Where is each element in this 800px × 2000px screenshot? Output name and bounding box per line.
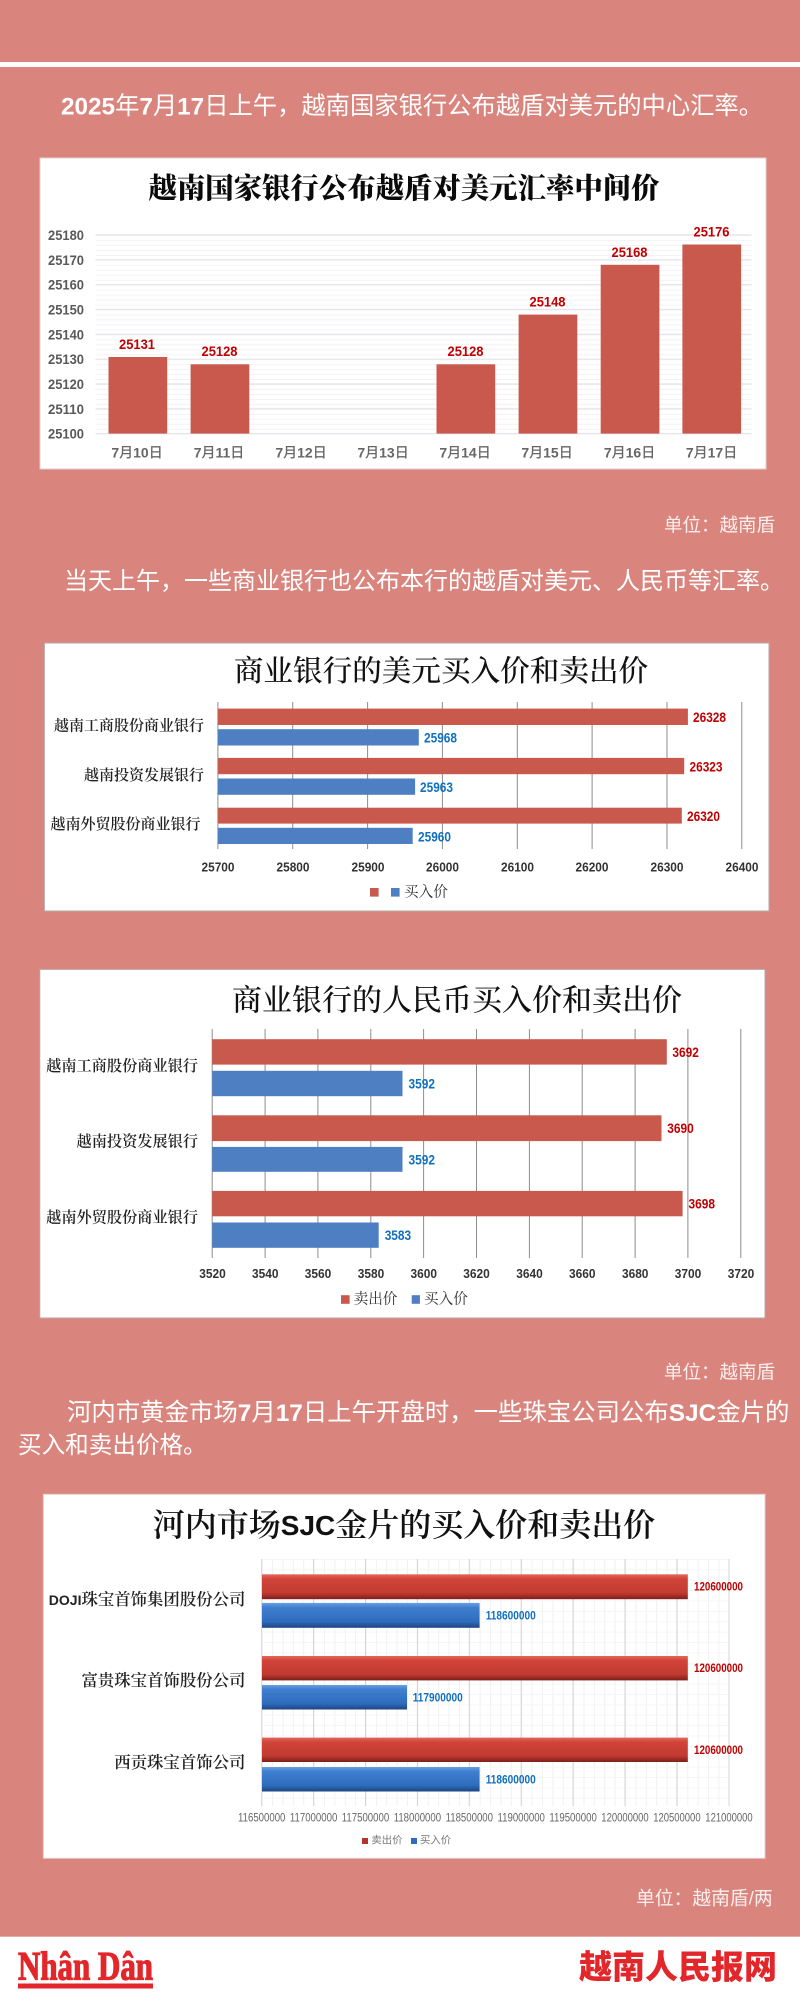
- x axis date labels: 7月10日: [111, 445, 163, 461]
- x axis date labels: 7月17日: [686, 445, 737, 461]
- sell price bars: [212, 1039, 683, 1216]
- bank labels: 越南外贸股份商业银行: [46, 1208, 198, 1226]
- bar value labels: 25128: [202, 343, 238, 359]
- y axis labels: 25110: [48, 401, 84, 417]
- legend: 卖出价: [371, 1834, 403, 1846]
- x axis labels: 3520: [199, 1266, 226, 1281]
- intro text: gold market: 买入和卖出价格。: [18, 1432, 207, 1459]
- bars: [108, 244, 741, 434]
- y axis labels: 25160: [48, 277, 84, 293]
- value labels: 117900000: [413, 1690, 463, 1704]
- panel: USD buy and sell bar chart: [44, 643, 769, 911]
- bar value labels: 25176: [694, 224, 730, 240]
- value labels: 25968: [424, 730, 457, 746]
- x axis labels: 3560: [305, 1266, 331, 1281]
- bank labels: [50, 716, 204, 833]
- x axis labels: 26200: [576, 860, 608, 874]
- bank labels: 越南投资发展银行: [76, 1132, 198, 1150]
- company labels: 富贵珠宝首饰股份公司: [81, 1671, 245, 1690]
- bar value labels: 25148: [530, 294, 566, 310]
- value labels: 118600000: [486, 1772, 536, 1786]
- x axis labels: [199, 1266, 754, 1281]
- x axis labels: 3720: [728, 1266, 754, 1281]
- y axis labels: 25140: [48, 326, 84, 342]
- legend: 买入价: [420, 1834, 452, 1846]
- legend: 买入价: [404, 883, 448, 900]
- y axis labels: [48, 227, 84, 442]
- x axis labels: 116500000: [238, 1812, 285, 1824]
- x axis labels: 3620: [463, 1266, 490, 1281]
- x axis labels: 120000000: [601, 1812, 649, 1824]
- footer band: [0, 1937, 800, 2000]
- x axis labels: 26100: [501, 860, 534, 874]
- value labels: 3690: [667, 1120, 694, 1136]
- value labels: 120600000: [694, 1743, 743, 1757]
- x axis labels: [202, 860, 758, 874]
- company labels: 西贡珠宝首饰公司: [114, 1753, 245, 1772]
- value labels: [418, 709, 726, 844]
- legend: [362, 1834, 452, 1846]
- intro text: gold market: [18, 1400, 789, 1459]
- chart title: 越南国家银行公布越盾对美元汇率中间价: [148, 172, 660, 205]
- unit note 2: 单位：越南盾: [664, 1362, 775, 1382]
- value labels: 3583: [385, 1227, 411, 1243]
- x axis labels: 3660: [569, 1266, 596, 1281]
- legend: 买入价: [424, 1290, 468, 1308]
- panel: RMB buy and sell bar chart: [40, 969, 765, 1318]
- legend: 卖出价: [354, 1290, 398, 1308]
- x axis date labels: 7月12日: [275, 445, 327, 461]
- bank labels: [46, 1057, 198, 1226]
- x axis labels: 117500000: [342, 1812, 389, 1824]
- x axis labels: 3700: [675, 1266, 701, 1281]
- x axis labels: [238, 1812, 753, 1824]
- value labels: 26328: [693, 709, 726, 725]
- x axis labels: 3580: [358, 1266, 384, 1281]
- chart title: 河内市场SJC金片的买入价和卖出价: [153, 1507, 655, 1543]
- x axis date labels: 7月11日: [194, 445, 244, 461]
- sell price bars: [218, 709, 688, 824]
- y axis labels: 25130: [48, 351, 84, 367]
- x axis labels: 25800: [276, 860, 310, 874]
- company labels: [49, 1590, 245, 1772]
- bank labels: 越南投资发展银行: [84, 766, 204, 784]
- site name: 越南人民报网: [579, 1948, 777, 1986]
- x axis labels: 119500000: [549, 1812, 597, 1824]
- bar value labels: 25128: [448, 343, 484, 359]
- x axis date labels: [111, 445, 737, 461]
- x axis date labels: 7月15日: [521, 445, 573, 461]
- y axis labels: 25120: [48, 376, 84, 392]
- value labels: 120600000: [694, 1580, 743, 1594]
- value labels: 26323: [690, 758, 723, 774]
- bar value labels: [119, 224, 730, 359]
- bank labels: 越南工商股份商业银行: [46, 1057, 198, 1075]
- bar value labels: 25131: [119, 336, 155, 352]
- top divider line: [0, 62, 800, 67]
- intro text: commercial banks: 当天上午，一些商业银行也公布本行的越盾对美元、人民币等汇率。: [64, 568, 784, 595]
- legend: [341, 1290, 468, 1308]
- value labels: 25960: [418, 828, 451, 844]
- value labels: 3692: [672, 1044, 699, 1060]
- x axis labels: 3680: [622, 1266, 648, 1281]
- chart title: 商业银行的人民币买入价和卖出价: [232, 984, 682, 1018]
- x axis date labels: 7月13日: [357, 445, 409, 461]
- x axis labels: 3640: [516, 1266, 543, 1281]
- unit note 1: 单位：越南盾: [664, 514, 775, 536]
- value labels: 3592: [408, 1152, 435, 1168]
- sell price bars: [262, 1574, 688, 1762]
- x axis labels: 119000000: [498, 1812, 545, 1824]
- x axis labels: 25900: [352, 860, 384, 874]
- x axis date labels: 7月16日: [604, 445, 655, 461]
- x axis labels: 121000000: [705, 1812, 753, 1824]
- value labels: 120600000: [694, 1661, 743, 1675]
- x axis date labels: 7月14日: [439, 445, 491, 461]
- x axis labels: 26400: [726, 860, 758, 874]
- buy price bars: [218, 729, 419, 844]
- company labels: DOJI珠宝首饰集团股份公司: [49, 1590, 245, 1609]
- value labels: [413, 1580, 743, 1786]
- chart title: 商业银行的美元买入价和卖出价: [234, 655, 648, 688]
- y axis labels: 25170: [48, 252, 84, 268]
- y axis labels: 25150: [48, 302, 84, 318]
- x axis labels: 26300: [650, 860, 684, 874]
- x axis labels: 3540: [252, 1266, 279, 1281]
- intro text: gold market: 河内市黄金市场7月17日上午开盘时，一些珠宝公司公布SJC金片的: [67, 1400, 789, 1426]
- value labels: [385, 1044, 715, 1243]
- x axis labels: 118000000: [394, 1812, 441, 1824]
- buy price bars: [262, 1603, 480, 1792]
- value labels: 118600000: [486, 1608, 536, 1622]
- legend: [370, 883, 448, 900]
- value labels: 3698: [688, 1196, 715, 1212]
- unit note 3: 单位：越南盾/两: [636, 1888, 773, 1908]
- value labels: 25963: [420, 779, 453, 795]
- y axis labels: 25180: [48, 227, 84, 243]
- buy price bars: [212, 1071, 402, 1248]
- y axis labels: 25100: [48, 426, 84, 442]
- bank labels: 越南工商股份商业银行: [54, 716, 204, 734]
- x axis labels: 118500000: [446, 1812, 493, 1824]
- panel: central rate column chart: [40, 158, 766, 469]
- x axis labels: 117000000: [290, 1812, 337, 1824]
- bank labels: 越南外贸股份商业银行: [50, 815, 200, 833]
- x axis labels: 3600: [411, 1266, 437, 1281]
- x axis labels: 26000: [426, 860, 459, 874]
- value labels: 26320: [687, 808, 720, 824]
- bar value labels: 25168: [612, 244, 648, 260]
- x axis labels: 25700: [202, 860, 234, 874]
- value labels: 3592: [408, 1076, 435, 1092]
- panel: SJC gold bar chart: [43, 1494, 765, 1858]
- x axis labels: 120500000: [653, 1812, 701, 1824]
- intro text: central rate: 2025年7月17日上午，越南国家银行公布越盾对美元的中心汇率。: [61, 93, 763, 120]
- logo: Nhan Dan: Nhân Dân: [18, 1944, 153, 1988]
